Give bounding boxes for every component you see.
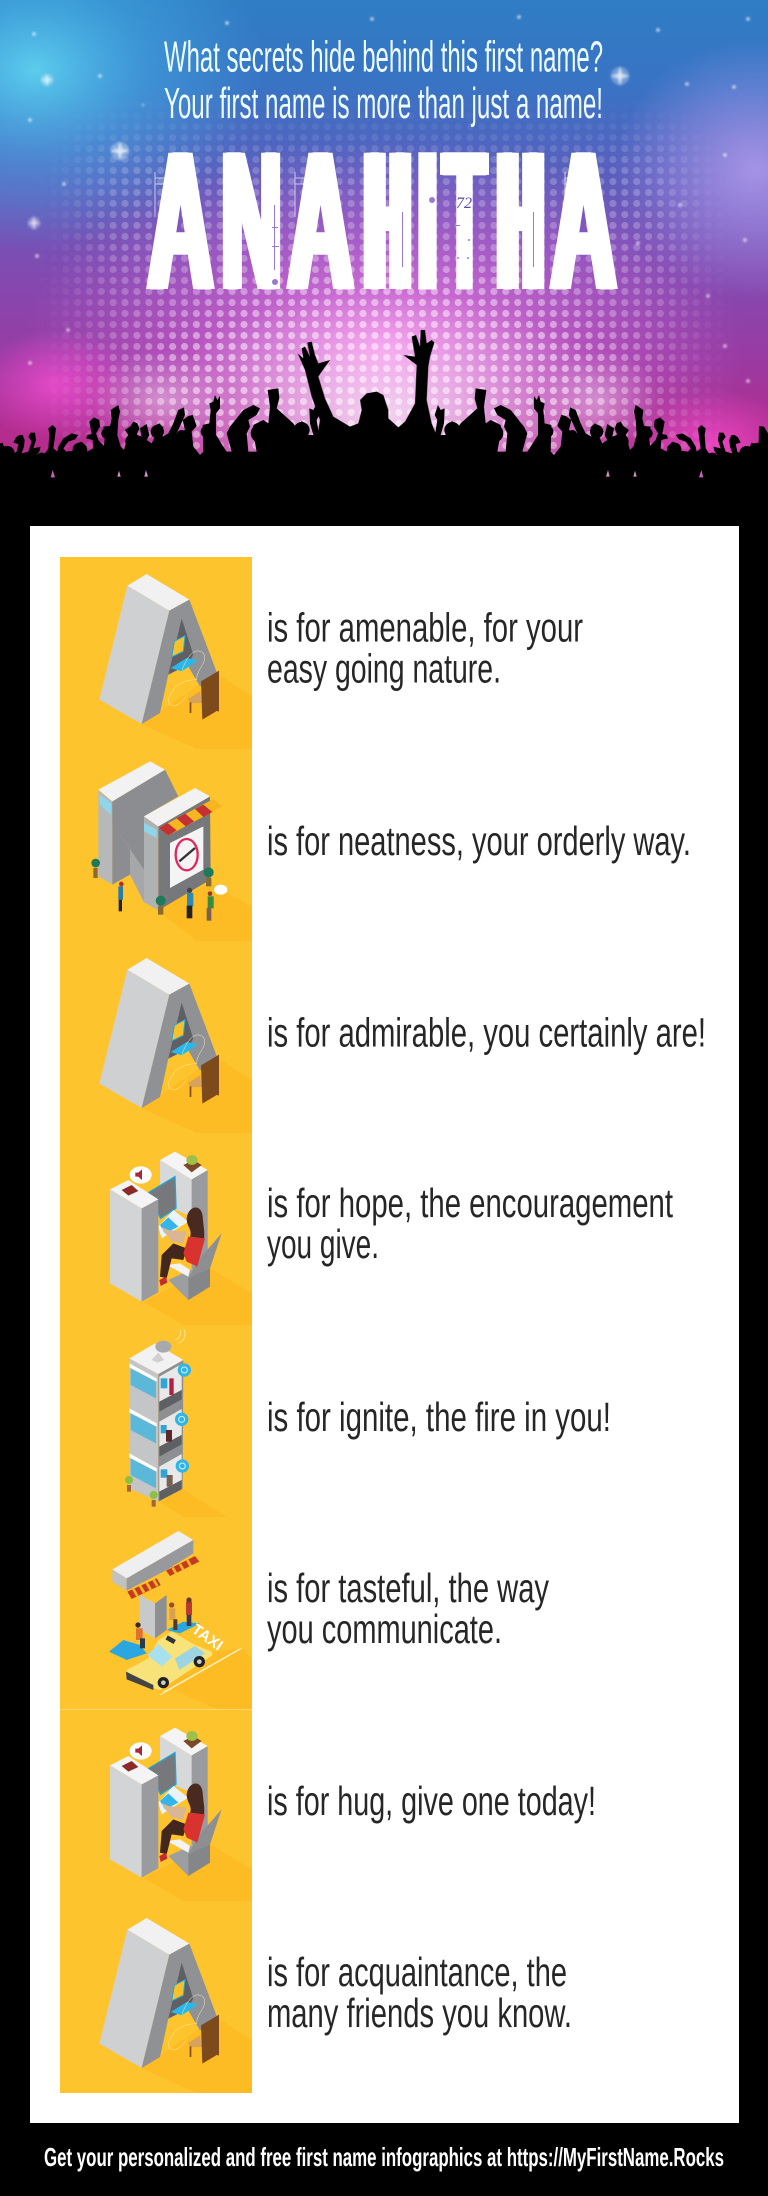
- label: hope text: [267, 1180, 673, 1267]
- row: T tasteful: [60, 1517, 549, 1709]
- title: first name: A: [288, 110, 352, 331]
- row: H hope: [60, 1133, 673, 1325]
- central figure with raised hands: [298, 330, 447, 533]
- label: amenable text: is for amenable, for your: [267, 604, 583, 650]
- row: A acquaintance: [60, 1901, 572, 2093]
- sparkling stars: [27, 16, 750, 382]
- row: A amenable: [60, 557, 583, 749]
- crowd silhouette: left half: [0, 388, 333, 530]
- icon: isometric letter H with woman at desk: [60, 1709, 252, 1901]
- row: I ignite: [60, 1325, 611, 1517]
- icon: isometric letter A with desk and chair: [60, 557, 252, 749]
- title: first name: H: [367, 110, 408, 331]
- icon: isometric letter N with shop awning and no smoking sign: [60, 749, 252, 941]
- title distress marks: 72: [456, 195, 472, 212]
- label: amenable text: easy going nature.: [267, 646, 501, 692]
- label: amenable text: [267, 604, 583, 692]
- label: acquaintance text: many friends you know.: [267, 1990, 572, 2036]
- title: first name: H: [499, 110, 541, 331]
- title: first name: I: [410, 110, 445, 331]
- label: acquaintance text: is for acquaintance, the: [267, 1949, 567, 1995]
- label: hope text: you give.: [267, 1221, 379, 1267]
- label: acquaintance text: [267, 1949, 572, 2036]
- heading: tagline: [164, 32, 603, 128]
- title: first name: A: [148, 110, 212, 331]
- label: tasteful text: [267, 1565, 549, 1652]
- icon: isometric letter A with desk and chair: [60, 941, 252, 1133]
- title: first name: A: [551, 110, 615, 331]
- title: first name: [146, 110, 618, 331]
- row: A admirable: [60, 941, 706, 1133]
- title: first name: N: [221, 110, 282, 331]
- crowd silhouette: right half: [421, 388, 768, 530]
- hero background with stage lights and crowd: [0, 0, 768, 478]
- icon: isometric letter T with taxi: [60, 1517, 252, 1709]
- title: first name: T: [442, 110, 487, 331]
- row: H hug: [60, 1709, 596, 1901]
- title distress marks: [154, 172, 568, 285]
- label: tasteful text: is for tasteful, the way: [267, 1565, 549, 1611]
- icon: isometric letter A with desk and chair: [60, 1901, 252, 2093]
- icon: isometric letter T with taxi: TAXI: [188, 1621, 226, 1654]
- icon: isometric letter H with woman at desk: [60, 1133, 252, 1325]
- label: tasteful text: you communicate.: [267, 1606, 502, 1652]
- row: N neatness: [60, 749, 691, 941]
- icon: isometric letter I as office tower: [60, 1325, 252, 1517]
- panel: white content card: [30, 526, 739, 2123]
